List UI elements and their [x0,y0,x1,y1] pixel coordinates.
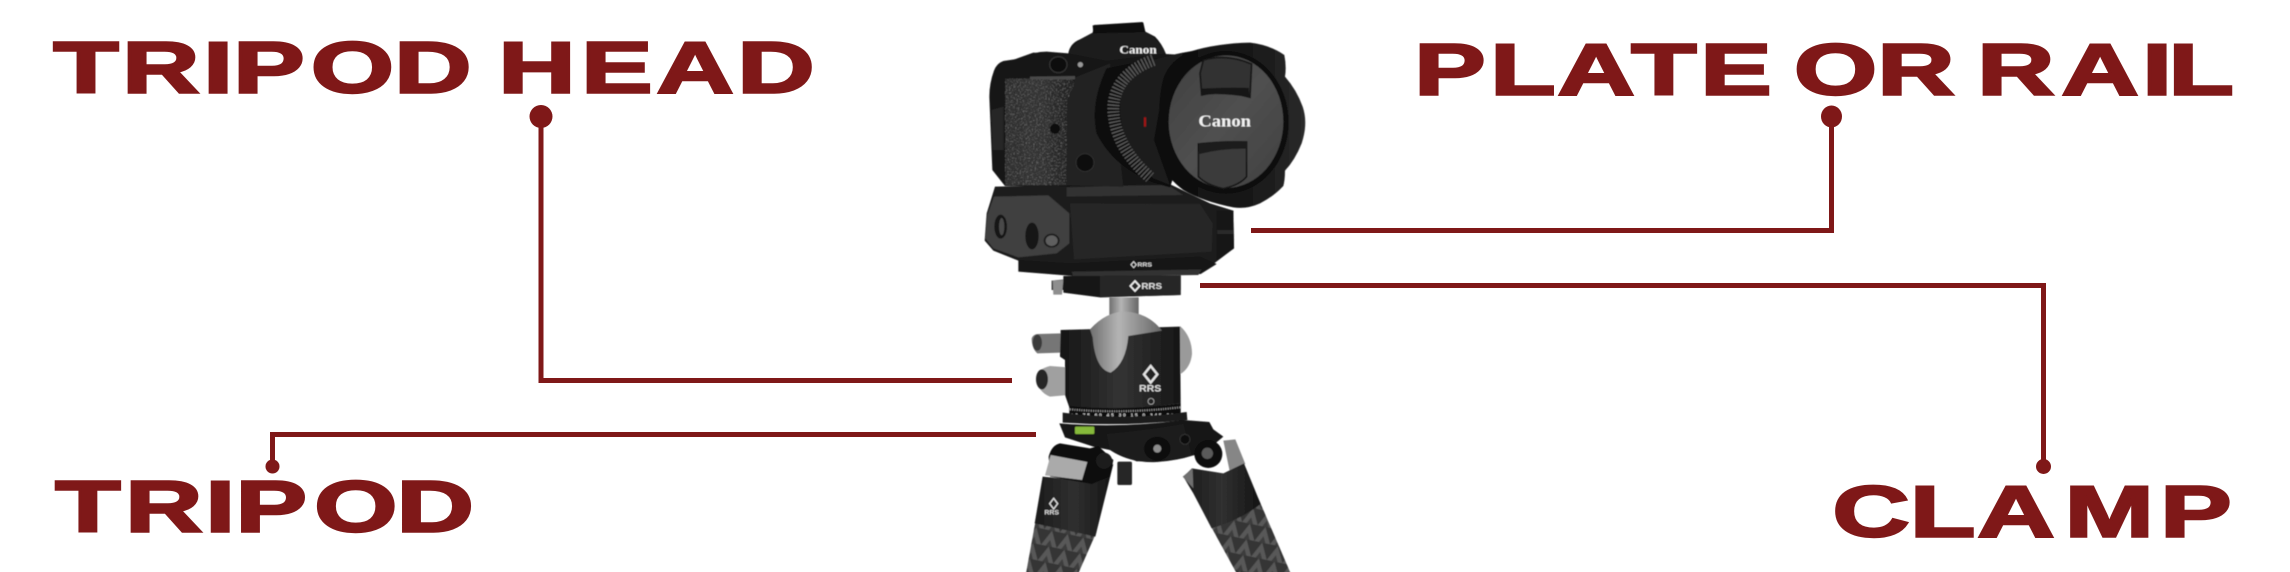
leader line: plate or rail [1251,106,1842,230]
lens [1095,47,1217,187]
L-plate under the camera [1018,257,1217,290]
lens cap [1169,55,1283,189]
brand name on body: Canon [1119,44,1157,56]
lens hood [1159,43,1305,208]
right tripod leg [1183,439,1291,572]
leader line: tripod [266,434,1036,474]
photo: camera on tripod [985,22,1305,572]
leader line: tripod head [530,105,1012,380]
clamp and ball head [1026,275,1291,572]
heading: plate or rail: PLATE OR RAIL [1414,29,2234,110]
heading: tripod: TRIPOD [55,466,474,547]
left tripod leg [1026,443,1113,572]
camera body [989,22,1183,187]
RRS logo on head [1139,366,1161,393]
ball head: 90 75 60 45 30 15 0 345 330 [1071,413,1178,419]
tripod apex [1059,420,1223,485]
camera with lens and battery grip [985,22,1305,290]
L-plate under the camera: RRS [1137,263,1152,269]
brand name on lens cap: Canon [1198,112,1252,131]
leader line: clamp [1200,286,2051,474]
clamp [1053,275,1181,297]
battery grip [985,183,1234,264]
clamp: RRS [1141,281,1162,291]
RRS logo on head: RRS [1139,383,1161,393]
heading: tripod head: TRIPOD HEAD [53,27,815,108]
RRS logo on leg: RRS [1044,511,1059,517]
heading: clamp: CLAMP [1833,471,2232,552]
ball head [1032,297,1192,424]
